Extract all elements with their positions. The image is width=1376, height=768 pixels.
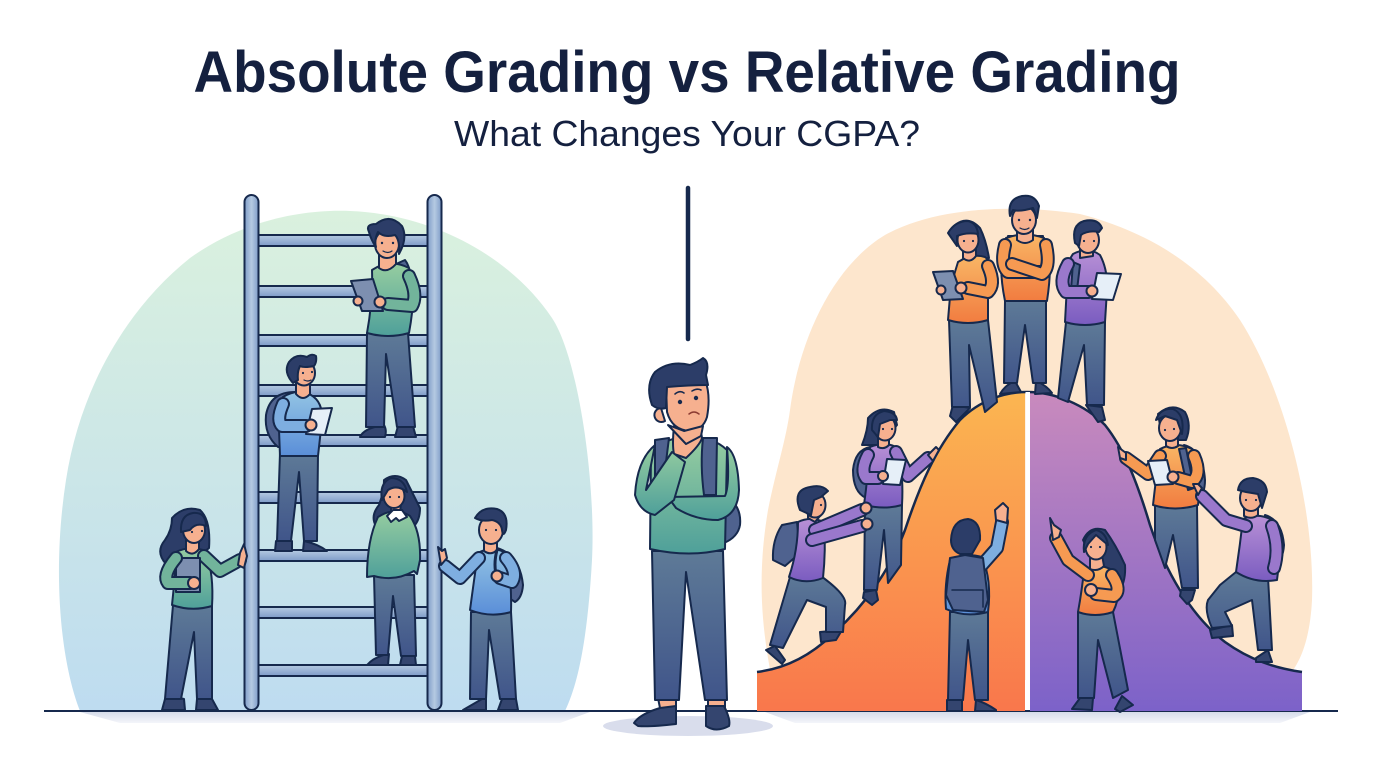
bell curve outline <box>757 392 1302 672</box>
shadow under central student <box>603 716 773 736</box>
person: woman holding book at left <box>160 509 247 710</box>
chart: bell curve <box>757 392 1302 711</box>
person: man in purple hoodie with paper on top of curve <box>1058 220 1121 422</box>
person: climbing man with backpack, left slope <box>766 486 872 664</box>
person: man with backpack and paper on ladder <box>266 355 332 551</box>
baseline <box>44 710 1338 712</box>
panel: absolute grading background blob <box>59 211 593 711</box>
title: Absolute Grading vs Relative Grading <box>194 40 1180 105</box>
person: man in purple climbing, right slope <box>1193 478 1284 662</box>
person: woman in orange with paper, right slope <box>1118 407 1205 604</box>
subtitle: What Changes Your CGPA? <box>454 113 920 154</box>
person: woman in purple with paper, left slope <box>853 410 939 605</box>
panel: relative grading background blob <box>762 209 1312 680</box>
person: man with arms crossed on top of curve <box>1000 196 1052 394</box>
person: man with tablet at top of ladder <box>351 219 416 437</box>
person: man with backpack at right <box>438 508 523 710</box>
person: student from behind with backpack, pointing up <box>946 503 1008 711</box>
person: woman with tablet on top of curve <box>933 221 997 422</box>
person: woman in green on ladder <box>367 476 420 665</box>
person: woman in orange pointing up <box>1050 518 1133 712</box>
right half of bell curve <box>1030 392 1302 711</box>
ground shadow <box>80 712 1310 723</box>
central thinking student <box>634 358 740 730</box>
left half of bell curve <box>757 392 1025 711</box>
ladder <box>244 195 442 710</box>
divider line <box>686 188 690 339</box>
